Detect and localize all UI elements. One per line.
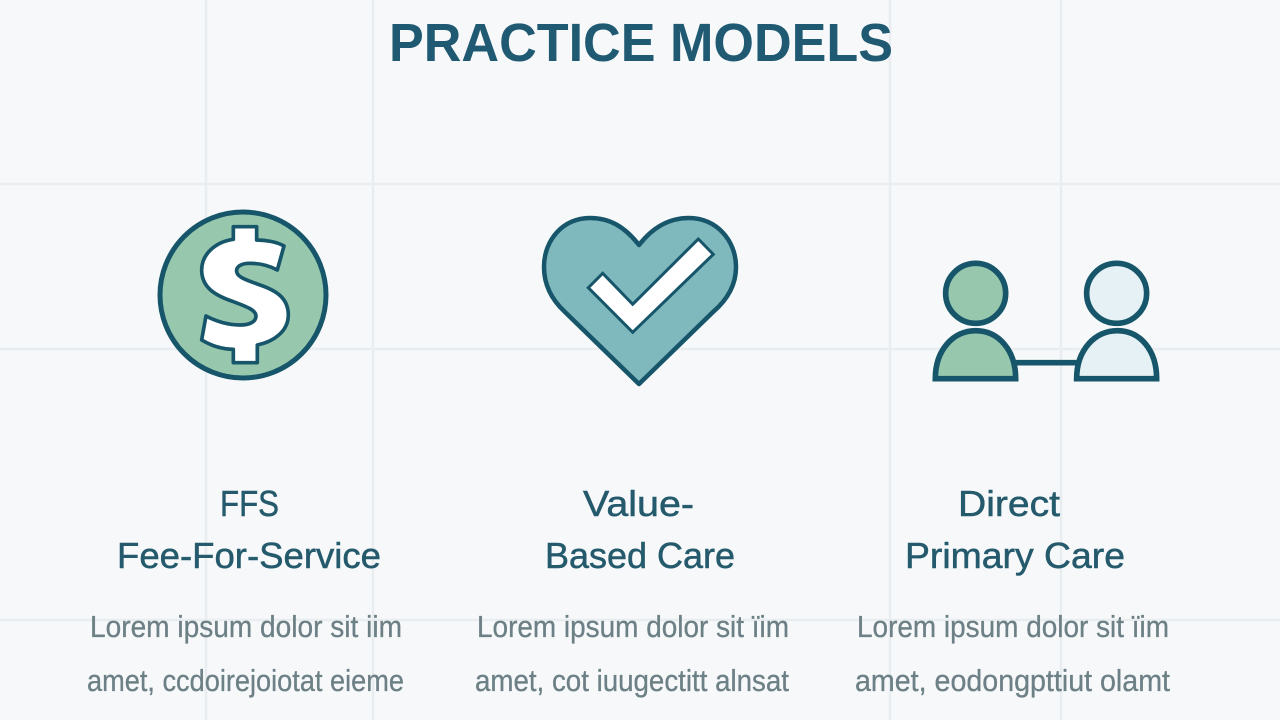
- icon: two connected people: [935, 263, 1157, 379]
- heading: Direct Primary Care: Direct: [958, 483, 1060, 524]
- heading: FFS Fee-For-Service: FFS: [220, 483, 279, 524]
- text: Direct Primary Care description: [855, 609, 1170, 698]
- column: Value-Based Care: [475, 483, 789, 698]
- text: FFS description: Lorem ipsum dolor sit iim: [90, 609, 402, 644]
- heading: Value-Based Care: [545, 483, 735, 576]
- icon: dollar coin: [160, 212, 326, 378]
- column: Direct Primary Care: [855, 483, 1170, 698]
- heading: FFS Fee-For-Service: [117, 483, 381, 576]
- text: FFS description: [87, 609, 404, 698]
- heading: Value-Based Care: Based Care: [545, 535, 735, 576]
- title: PRACTICE MODELS: [389, 13, 893, 73]
- text: Value-Based Care description: amet, cot iuugectitt alnsat: [475, 663, 789, 698]
- text: FFS description: amet, ccdoirejoiotat eieme: [87, 663, 404, 698]
- heading: Direct Primary Care: [905, 483, 1125, 576]
- heading: Direct Primary Care: Primary Care: [905, 535, 1125, 576]
- text: Value-Based Care description: [475, 609, 789, 698]
- text: Value-Based Care description: Lorem ipsum dolor sit ïim: [477, 609, 789, 644]
- heading: FFS Fee-For-Service: Fee-For-Service: [117, 535, 381, 576]
- icon: heart with checkmark: [544, 218, 736, 384]
- text: Direct Primary Care description: amet, eodongpttiut olamt: [855, 663, 1170, 698]
- column: FFS: [87, 483, 404, 698]
- heading: Value-Based Care: Value-: [583, 483, 694, 524]
- text: Direct Primary Care description: Lorem ipsum dolor sit ïim: [857, 609, 1169, 644]
